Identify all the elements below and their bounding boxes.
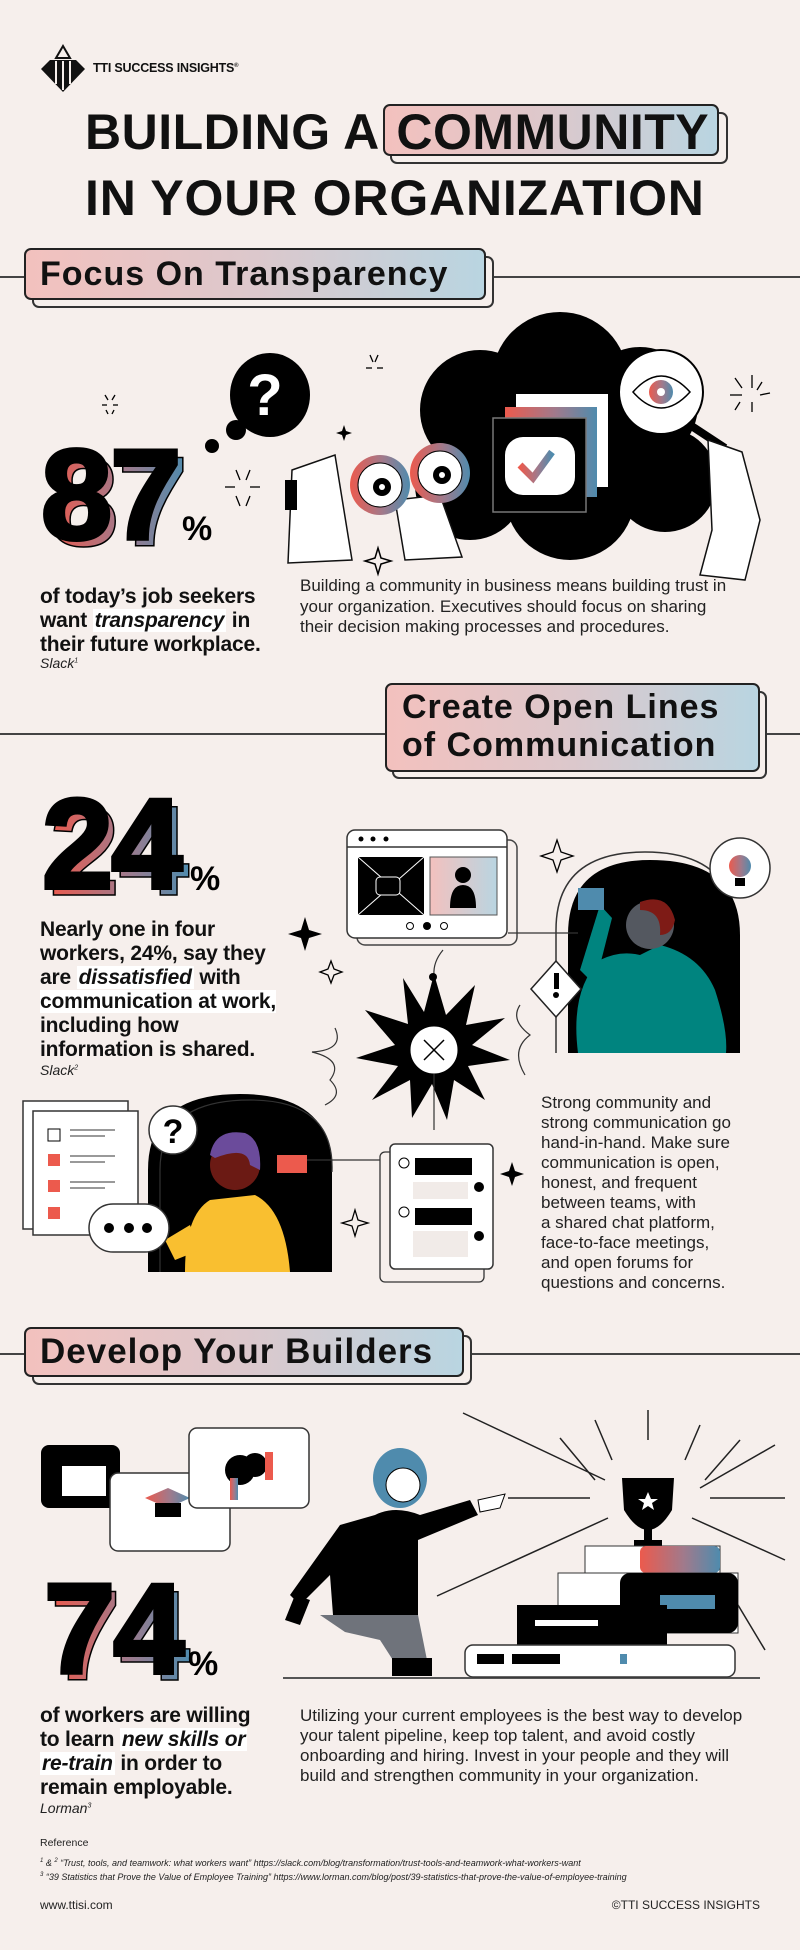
stat text: dissatisfied: including how (40, 1014, 179, 1037)
stat text: new skills: Lorman3 (40, 1800, 91, 1816)
references: 1 & 2 “Trust, tools, and teamwork: what workers want” https://slack.com/blog/transformation/trust-tools-and-teamwork-what-workers-want (40, 1858, 581, 1868)
illustration: video call window (347, 830, 517, 945)
header: Focus On Transparency: Focus On Transparency (40, 255, 448, 293)
illustration: frustrated man with can phone (89, 1094, 380, 1272)
logo (41, 44, 238, 92)
body text: communication: honest, and frequent (541, 1173, 697, 1192)
body text: transparency: your organization. Executives should focus on sharing (300, 596, 706, 616)
stat text: dissatisfied (40, 918, 276, 1078)
body text: communication (541, 1093, 731, 1292)
icon: starburst with X (288, 840, 573, 1236)
title (85, 104, 728, 226)
header: Develop Your Builders: Develop Your Builders (40, 1332, 433, 1371)
illustration: frustrated man with can phone: ? (163, 1113, 183, 1151)
body text: communication: hand-in-hand. Make sure (541, 1133, 730, 1152)
footer: ©TTI SUCCESS INSIGHTS (612, 1898, 760, 1912)
body text: communication: communication is open, (541, 1153, 720, 1172)
body text: builders: onboarding and hiring. Invest in your people and they will (300, 1746, 729, 1765)
header: Develop Your Builders (24, 1327, 472, 1385)
stat text: transparency: want transparency in (40, 609, 250, 632)
stat text: transparency: Slack1 (40, 655, 78, 671)
body text: communication: strong communication go (541, 1113, 731, 1132)
header: Create Open Lines of Communication (385, 683, 767, 779)
stat text: dissatisfied: information is shared. (40, 1038, 255, 1061)
stat text: new skills (40, 1704, 250, 1816)
body text: communication: face-to-face meetings, (541, 1233, 709, 1252)
stat text: transparency (40, 585, 261, 671)
icon: thought bubble question (205, 353, 310, 453)
body text: communication: Strong community and (541, 1093, 711, 1112)
illustration: checklist papers (23, 1101, 138, 1235)
title: IN YOUR ORGANIZATION (85, 170, 705, 226)
body text: builders: build and strengthen community in your organization. (300, 1766, 699, 1785)
stat text: dissatisfied: are dissatisfied with (40, 966, 241, 989)
references: 3 “39 Statistics that Prove the Value of Employee Training” https://www.lorman.com/blog/post/39-statistics-that-prove-the-value-of-employee-training (40, 1872, 627, 1882)
stat text: new skills: of workers are willing (40, 1704, 250, 1727)
illustration: learning icons (41, 1428, 309, 1551)
header: Create Open Lines of Communication: of Communication (402, 726, 716, 764)
body text: communication: between teams, with (541, 1193, 696, 1212)
icon: thought bubble question: ? (247, 363, 283, 428)
header: Focus On Transparency (24, 248, 494, 308)
footer (40, 1898, 760, 1912)
stat text: new skills: to learn new skills or (40, 1728, 245, 1751)
body text: transparency: their decision making processes and procedures. (300, 617, 669, 636)
references (40, 1837, 627, 1882)
title: BUILDING A COMMUNITY (85, 104, 709, 160)
body text: communication: and open forums for (541, 1253, 693, 1272)
stat 87%: % (182, 510, 212, 548)
stat text: dissatisfied: communication at work, (40, 990, 276, 1013)
illustration: woman pointing (283, 1448, 760, 1678)
stat text: transparency: their future workplace. (40, 633, 261, 656)
stat text: dissatisfied: workers, 24%, say they (40, 942, 266, 965)
header: Create Open Lines of Communication: Create Open Lines (402, 688, 719, 726)
illustration: binoculars and cloud (102, 312, 770, 580)
stat text: new skills: re-train in order to (42, 1752, 222, 1775)
body text: transparency (300, 576, 726, 636)
body text: transparency: Building a community in business means building trust in (300, 576, 726, 595)
stat text: transparency: of today’s job seekers (40, 585, 255, 608)
body text: builders: your talent pipeline, keep top talent, and avoid costly (300, 1726, 695, 1745)
body text: communication: a shared chat platform, (541, 1213, 715, 1232)
footer: www.ttisi.com (40, 1898, 113, 1912)
illustration: chat window (380, 1144, 493, 1282)
references: Reference (40, 1837, 88, 1849)
logo: TTI SUCCESS INSIGHTS® (93, 61, 238, 75)
body text: communication: questions and concerns. (541, 1273, 725, 1292)
stat text: dissatisfied: Nearly one in four (40, 918, 215, 941)
stat 74%: % (188, 1645, 218, 1683)
stat text: dissatisfied: Slack2 (40, 1062, 78, 1078)
stat 24%: % (190, 860, 220, 898)
stat text: new skills: remain employable. (40, 1776, 232, 1799)
illustration: trophy and books (437, 1410, 785, 1677)
body text: builders: Utilizing your current employees is the best way to develop (300, 1706, 742, 1725)
illustration: man with can phone (508, 838, 770, 1053)
body text: builders (300, 1706, 742, 1785)
